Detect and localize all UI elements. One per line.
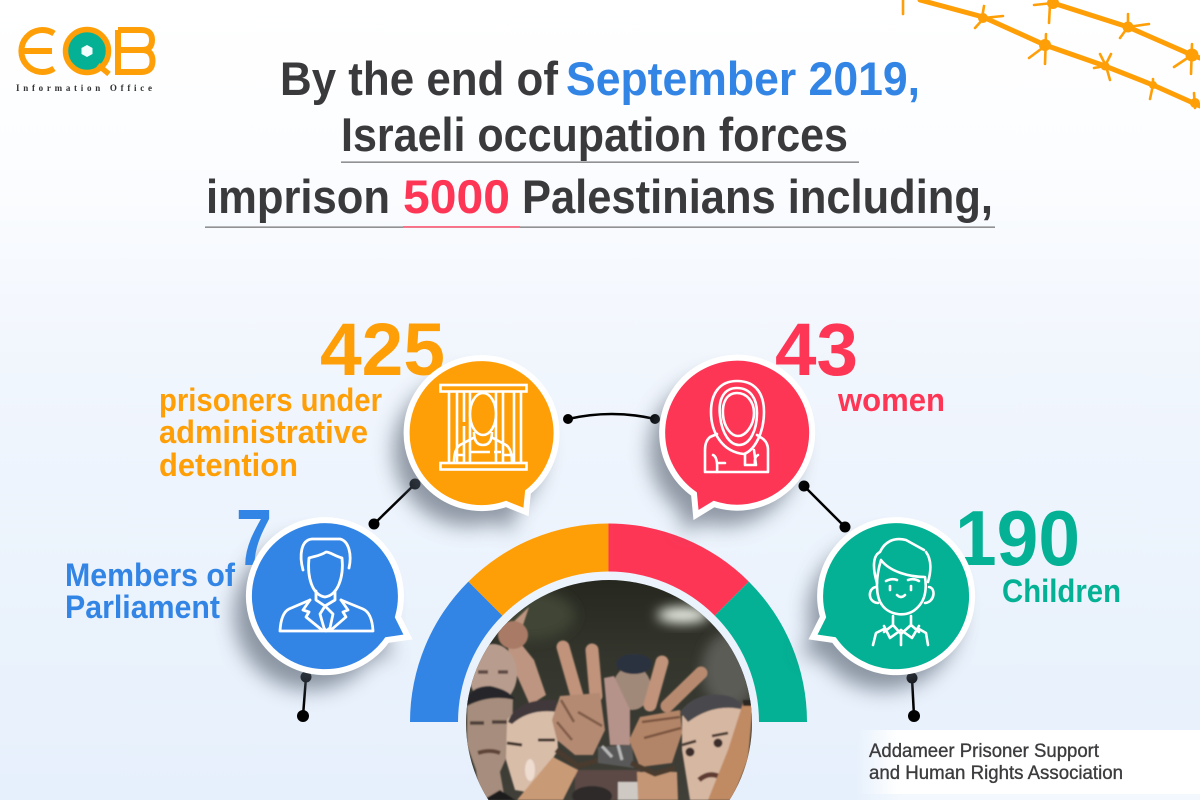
title: imprison: [206, 170, 390, 223]
title: 5000: [403, 170, 510, 223]
title: Israeli occupation forces: [341, 108, 848, 161]
photo: raised handcuffed hands: [460, 575, 760, 800]
panel: members of parliament: 7: [236, 493, 272, 582]
icon: prisoner behind bars: [440, 385, 526, 470]
right arm: [708, 703, 753, 800]
icon: boy: [870, 539, 934, 645]
panel: women: 43: [775, 308, 858, 391]
label: prisoners under administrative detention: detention: [159, 447, 298, 483]
connector: orange to red: [563, 414, 660, 424]
right palm: [629, 710, 682, 767]
connector: orange to blue: [368, 478, 420, 530]
label: members of parliament: Parliament: [65, 589, 220, 625]
source box: [856, 730, 1200, 800]
handcuffs: [598, 745, 634, 768]
right forearm and hand: [637, 772, 678, 800]
panel: children: [801, 494, 1121, 690]
connector: below green: [906, 672, 920, 722]
connector: below blue: [297, 672, 312, 722]
logo: EQB Information Office: [16, 30, 152, 93]
panel: administrative detention: 425: [320, 308, 445, 391]
label: members of parliament: [65, 557, 235, 625]
semicircle gauge: [410, 524, 807, 722]
left man: [467, 697, 513, 800]
label: prisoners under administrative detention: prisoners under: [159, 382, 382, 418]
icon: woman in hijab: [705, 381, 768, 472]
title: September 2019,: [566, 52, 920, 105]
panel: women: [649, 308, 945, 533]
top left face: [470, 643, 518, 696]
label: prisoners under administrative detention: administrative: [159, 414, 368, 450]
panel: children: 190: [955, 494, 1080, 582]
label: prisoners under administrative detention: [159, 382, 382, 483]
panel: administrative detention: [159, 308, 557, 530]
title: Palestinians including,: [522, 170, 993, 223]
label: children: Children: [1002, 573, 1121, 609]
dark middle lower: [575, 770, 640, 800]
back man and blurred hand: [613, 666, 651, 710]
label: members of parliament: Members of: [65, 557, 235, 593]
right man: [682, 705, 746, 800]
center man: [506, 706, 558, 793]
connector: red to green: [798, 480, 850, 532]
icon: man in suit: [280, 539, 373, 631]
panel: members of parliament: [65, 493, 408, 690]
source box: Addameer Prisoner Support: [869, 741, 1100, 762]
lifted arm upper left: [505, 607, 546, 705]
title: [205, 52, 995, 228]
icon: barbed wire: [903, 0, 1200, 108]
logo: EQB Information Office: Information Office: [16, 83, 152, 93]
left forearm and hand: [517, 757, 578, 800]
title: By the end of: [280, 52, 558, 105]
source box: and Human Rights Association: [869, 763, 1123, 784]
label: women: women: [837, 382, 945, 418]
